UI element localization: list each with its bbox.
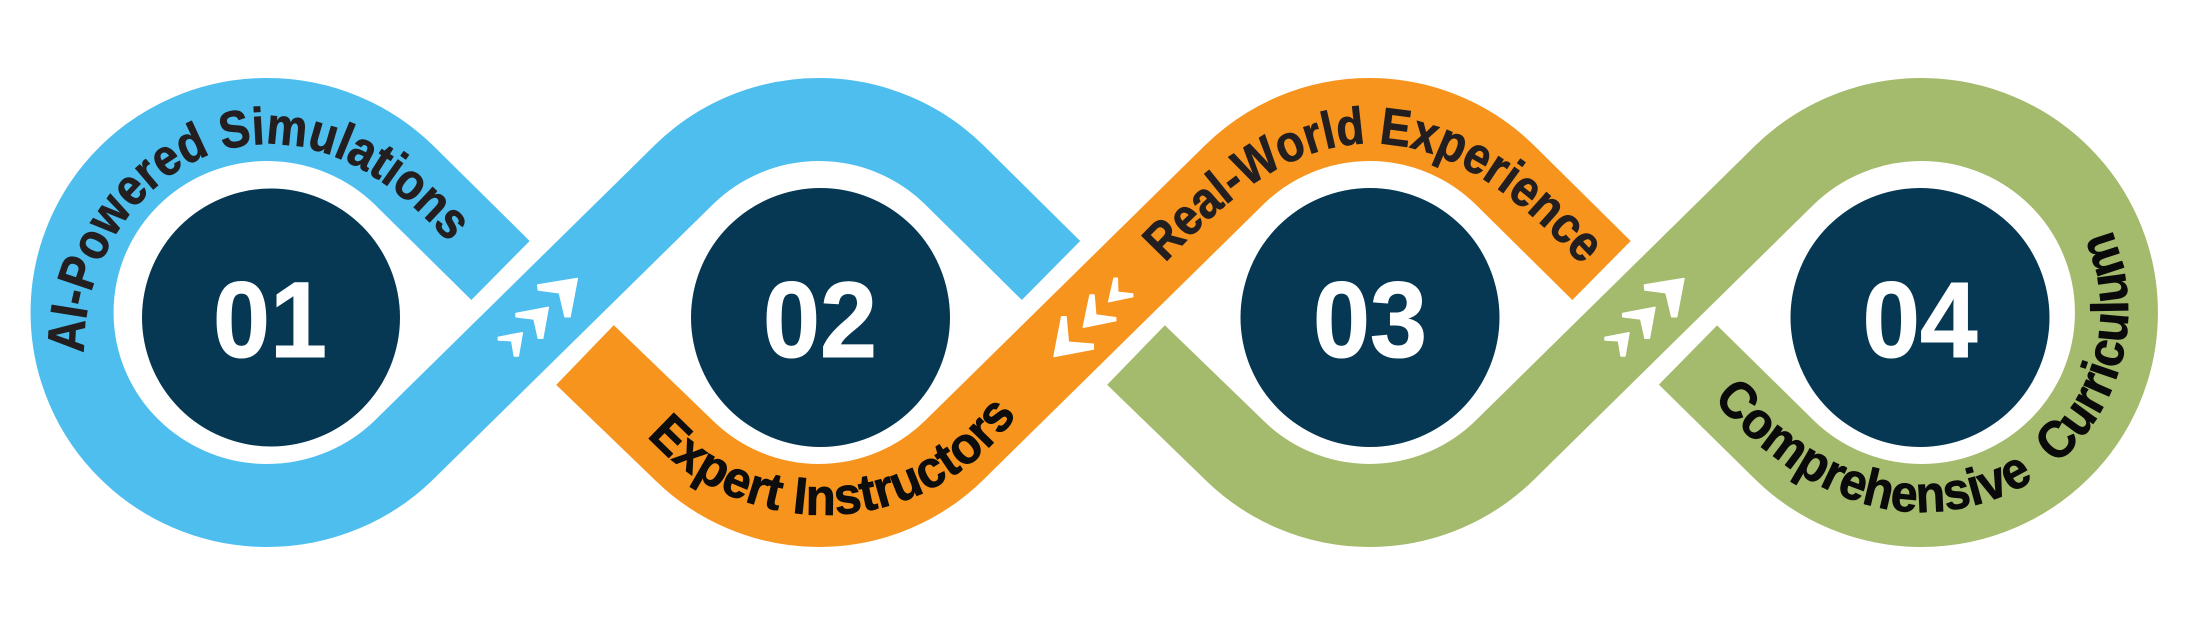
label: AI-Powered Simulations: AI-Powered Simulations bbox=[48, 106, 465, 352]
panel: step 3 bbox=[1107, 78, 2156, 546]
panel: step 4 bbox=[1720, 188, 2129, 513]
number 02: 02 bbox=[763, 259, 877, 380]
ribbon: green band bbox=[1136, 119, 2116, 505]
circle badge 01 bbox=[142, 188, 400, 446]
circle badge 03 bbox=[1240, 188, 1500, 447]
ribbon: blue band bbox=[72, 119, 1051, 506]
ribbon: orange band bbox=[585, 120, 1602, 505]
panel: step 2 bbox=[556, 80, 1631, 547]
label: Real-World Experience: Real-World Experience bbox=[1141, 106, 1598, 262]
arrows: orange band chevrons bbox=[1054, 278, 1133, 356]
circle badge 02 bbox=[691, 188, 950, 447]
arrows: blue band chevrons bbox=[498, 278, 577, 356]
circle badge 04 bbox=[1790, 188, 2050, 447]
panel: step 1 bbox=[30, 78, 1080, 546]
label: Expert Instructors: Expert Instructors bbox=[648, 402, 1014, 516]
arrows: green band chevrons bbox=[1605, 278, 1684, 356]
label: Comprehensive Curriculum: Comprehensive Curriculum bbox=[1720, 232, 2129, 513]
number 04: 04 bbox=[1862, 259, 1978, 380]
number 03: 03 bbox=[1313, 259, 1427, 380]
number 01: 01 bbox=[213, 259, 327, 380]
